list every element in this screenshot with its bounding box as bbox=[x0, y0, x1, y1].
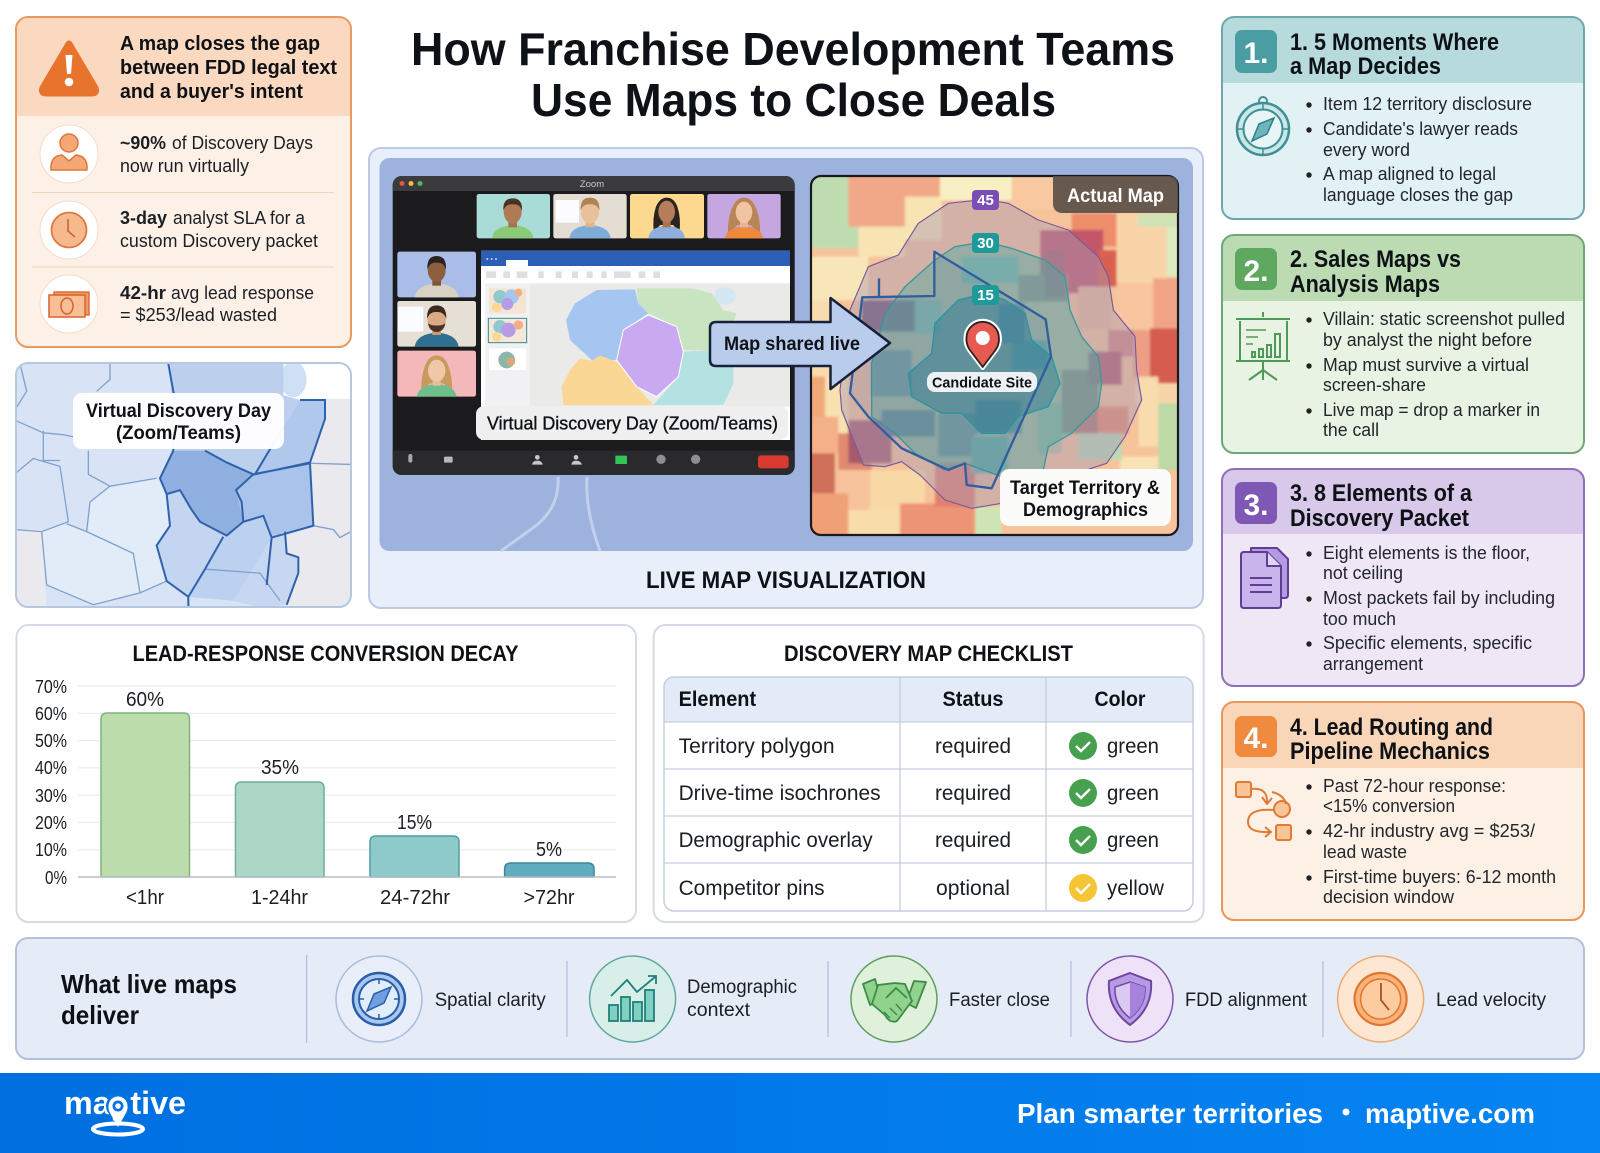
row: territory polygon bbox=[679, 732, 1159, 760]
callout: window caption bbox=[476, 406, 788, 440]
table header: Color bbox=[1094, 688, 1146, 711]
arrow: map shared live: Map shared live bbox=[724, 334, 860, 355]
row: territory polygon: required bbox=[935, 735, 1011, 758]
isochrone 45 minutes bbox=[840, 199, 1142, 508]
icon: routing flow bbox=[1236, 782, 1291, 840]
y axis labels: 30% bbox=[35, 786, 67, 806]
heading bbox=[61, 969, 237, 1030]
row: drive-time isochrones: green bbox=[1107, 782, 1159, 805]
badge: 15 bbox=[972, 285, 999, 305]
badge: 45: 45 bbox=[977, 192, 994, 209]
item: demographic context bbox=[590, 956, 797, 1042]
bullet list: Most packets fail by including bbox=[1323, 587, 1555, 608]
bullet list: 42-hr industry avg = $253/ bbox=[1323, 820, 1536, 841]
stat: lead response bbox=[120, 283, 314, 325]
panel: 5 moments bbox=[1222, 17, 1584, 219]
row: demographic overlay: required bbox=[935, 829, 1011, 852]
table header: Element bbox=[679, 688, 756, 711]
stat: virtual discovery days bbox=[120, 133, 313, 176]
heading bbox=[1290, 246, 1461, 298]
shared screen map app bbox=[481, 251, 790, 440]
bar: over 72hr bbox=[505, 839, 594, 877]
bullet list bbox=[1306, 93, 1532, 205]
bar: 1-24hr bbox=[236, 757, 324, 877]
row: competitor pins: optional bbox=[936, 877, 1010, 900]
tagline bbox=[1017, 1098, 1535, 1129]
y axis labels: 20% bbox=[35, 813, 67, 833]
title: How Franchise Development Teams bbox=[411, 23, 1175, 75]
heading: 3. 8 Elements of a bbox=[1290, 480, 1473, 507]
bullet list: too much bbox=[1323, 608, 1396, 629]
bullet list: Candidate's lawyer reads bbox=[1323, 118, 1518, 139]
heading: Analysis Maps bbox=[1290, 271, 1440, 298]
bullet list: screen-share bbox=[1323, 374, 1426, 395]
panel: discovery map checklist bbox=[654, 625, 1204, 922]
callout: virtual discovery day bbox=[73, 393, 284, 449]
title bbox=[411, 23, 1175, 126]
bullet list: language closes the gap bbox=[1323, 184, 1513, 205]
badge: 1: 1. bbox=[1243, 37, 1269, 70]
isochrone 15 minutes bbox=[908, 293, 1060, 433]
heading: live map visualization: LIVE MAP VISUALIZATION bbox=[646, 567, 926, 594]
stat: virtual discovery days: now run virtually bbox=[120, 156, 249, 176]
bar: under 1hr: 60% bbox=[126, 689, 164, 711]
icon: presentation chart bbox=[1236, 312, 1290, 380]
badge: 4 bbox=[1235, 716, 1277, 757]
item: spatial clarity bbox=[336, 956, 546, 1042]
badge: 2 bbox=[1235, 248, 1277, 290]
table bbox=[664, 677, 1193, 911]
row: drive-time isochrones: Drive-time isochrones bbox=[679, 782, 881, 805]
bullet list: not ceiling bbox=[1323, 562, 1403, 583]
panel: conversion decay chart bbox=[16, 625, 636, 922]
arrow: map shared live bbox=[710, 298, 890, 389]
bar: 1-24hr: 35% bbox=[261, 757, 299, 779]
stat: virtual discovery days: of Discovery Days bbox=[172, 133, 313, 153]
bar chart bbox=[35, 677, 616, 909]
callout: virtual discovery day: Virtual Discovery Day bbox=[86, 401, 271, 422]
label: target territory bbox=[1000, 469, 1171, 526]
heading: 1. 5 Moments Where bbox=[1290, 29, 1499, 56]
row: territory polygon: Territory polygon bbox=[679, 735, 835, 758]
stat: lead response: 42-hr bbox=[120, 283, 166, 303]
zoom call window: Zoom bbox=[580, 179, 604, 190]
panel: lead routing bbox=[1222, 702, 1584, 920]
row: drive-time isochrones bbox=[679, 779, 1159, 807]
item: lead velocity bbox=[1338, 956, 1546, 1042]
badge: 15: 15 bbox=[977, 287, 994, 304]
item: demographic context: Demographic bbox=[687, 977, 797, 998]
bullet list: decision window bbox=[1323, 886, 1455, 907]
bar: 24-72hr: 15% bbox=[397, 812, 432, 834]
row: demographic overlay: Demographic overlay bbox=[679, 829, 873, 852]
label: candidate site: Candidate Site bbox=[932, 374, 1032, 392]
actual map with isochrones bbox=[805, 170, 1185, 540]
x axis labels: 1-24hr bbox=[251, 887, 308, 909]
participant tiles bbox=[397, 194, 781, 397]
bar: over 72hr: 5% bbox=[536, 839, 562, 861]
heading: Discovery Packet bbox=[1290, 505, 1469, 532]
bullet list bbox=[1306, 542, 1555, 674]
table header bbox=[679, 688, 1146, 711]
zoom call window bbox=[392, 170, 1185, 594]
heading: LEAD-RESPONSE CONVERSION DECAY bbox=[132, 641, 519, 666]
row: demographic overlay bbox=[679, 826, 1159, 854]
icon: person bbox=[40, 125, 98, 183]
stat: analyst SLA: 3-day bbox=[120, 208, 167, 228]
row: competitor pins: yellow bbox=[1107, 877, 1165, 900]
footer band bbox=[0, 1073, 1600, 1153]
badge: 30 bbox=[972, 233, 999, 253]
heading bbox=[1290, 480, 1473, 532]
bullet list: by analyst the night before bbox=[1323, 329, 1532, 350]
row: drive-time isochrones: required bbox=[935, 782, 1011, 805]
x axis labels: >72hr bbox=[524, 887, 575, 909]
stat: analyst SLA: analyst SLA for a bbox=[173, 208, 306, 228]
item: faster close bbox=[851, 956, 1050, 1042]
row: competitor pins bbox=[679, 874, 1165, 902]
heading: gap statement: and a buyer's intent bbox=[120, 81, 303, 103]
x axis labels bbox=[126, 887, 575, 909]
callout: window caption: Virtual Discovery Day (Zoom/Teams) bbox=[487, 412, 778, 434]
icon: clock bbox=[40, 201, 98, 259]
item: faster close: Faster close bbox=[949, 990, 1050, 1011]
stat: virtual discovery days: ~90% bbox=[120, 133, 166, 153]
bullet list: lead waste bbox=[1323, 841, 1407, 862]
row: territory polygon: green bbox=[1107, 735, 1159, 758]
logo: maptive: maptive bbox=[64, 1085, 186, 1121]
badge: 30: 30 bbox=[977, 235, 994, 252]
tag: actual map bbox=[1053, 176, 1178, 213]
tagline: maptive.com bbox=[1365, 1098, 1535, 1129]
y axis labels: 50% bbox=[35, 731, 67, 751]
label: target territory: Target Territory & bbox=[1010, 478, 1160, 499]
stat: analyst SLA bbox=[120, 208, 318, 251]
bullet list: Eight elements is the floor, bbox=[1323, 542, 1530, 563]
stat: lead response: avg lead response bbox=[171, 283, 314, 303]
heading: a Map Decides bbox=[1290, 53, 1441, 80]
heading: gap statement: between FDD legal text bbox=[120, 57, 337, 79]
heading bbox=[1290, 29, 1499, 80]
y axis labels: 70% bbox=[35, 677, 67, 697]
bar: under 1hr bbox=[101, 689, 190, 877]
bullet list: Live map = drop a marker in bbox=[1323, 399, 1540, 420]
item: FDD alignment bbox=[1087, 956, 1308, 1042]
stat: analyst SLA: custom Discovery packet bbox=[120, 231, 318, 251]
item: demographic context: context bbox=[687, 1000, 751, 1021]
panel: FDD gap stats bbox=[16, 17, 351, 347]
panel: discovery packet bbox=[1222, 469, 1584, 686]
bullet list: arrangement bbox=[1323, 653, 1423, 674]
heading: deliver bbox=[61, 1000, 139, 1030]
icon: compass bbox=[1237, 97, 1289, 155]
item: spatial clarity: Spatial clarity bbox=[435, 990, 546, 1011]
badge: 1 bbox=[1235, 30, 1277, 73]
y axis labels: 60% bbox=[35, 704, 67, 724]
item: lead velocity: Lead velocity bbox=[1436, 990, 1546, 1011]
bullet list bbox=[1306, 308, 1565, 440]
bullet list bbox=[1306, 775, 1556, 907]
heading: 4. Lead Routing and bbox=[1290, 714, 1493, 741]
row: competitor pins: Competitor pins bbox=[679, 877, 825, 900]
y axis labels: 10% bbox=[35, 840, 67, 860]
panel: sales vs analysis maps bbox=[1222, 235, 1584, 453]
title: Use Maps to Close Deals bbox=[531, 74, 1056, 126]
badge: 45 bbox=[972, 190, 999, 210]
bullet list: every word bbox=[1323, 139, 1410, 160]
bar: 24-72hr bbox=[370, 812, 459, 877]
label: target territory: Demographics bbox=[1023, 500, 1148, 521]
toolbar bbox=[393, 451, 795, 476]
stat: lead response: = $253/lead wasted bbox=[120, 305, 277, 325]
bullet list: Specific elements, specific bbox=[1323, 632, 1532, 653]
x axis labels: <1hr bbox=[126, 887, 164, 909]
bullet list: <15% conversion bbox=[1323, 795, 1455, 816]
bullet list: A map aligned to legal bbox=[1323, 163, 1496, 184]
tag: actual map: Actual Map bbox=[1067, 186, 1164, 207]
item: FDD alignment: FDD alignment bbox=[1185, 990, 1308, 1011]
y axis labels: 40% bbox=[35, 758, 67, 778]
heading: 2. Sales Maps vs bbox=[1290, 246, 1461, 273]
table header: Status bbox=[942, 688, 1004, 711]
tagline: Plan smarter territories bbox=[1017, 1098, 1323, 1129]
bullet list: Item 12 territory disclosure bbox=[1323, 93, 1532, 114]
icon: candidate site pin bbox=[965, 321, 1000, 368]
bullet list: Past 72-hour response: bbox=[1323, 775, 1506, 796]
bullet list: the call bbox=[1323, 419, 1379, 440]
bullet list: First-time buyers: 6-12 month bbox=[1323, 866, 1556, 887]
heading: gap statement bbox=[120, 33, 337, 103]
heading: DISCOVERY MAP CHECKLIST bbox=[784, 641, 1074, 666]
icon: documents bbox=[1241, 548, 1288, 608]
bullet list: Villain: static screenshot pulled bbox=[1323, 308, 1565, 329]
panel: territory map bbox=[16, 362, 352, 608]
heading: gap statement: A map closes the gap bbox=[120, 33, 320, 55]
target territory polygon bbox=[850, 252, 1051, 488]
panel: what live maps deliver bbox=[16, 938, 1584, 1059]
icon: cash bbox=[40, 275, 98, 333]
y axis labels: 0% bbox=[45, 868, 67, 888]
icon: warning triangle bbox=[42, 44, 96, 93]
badge: 2: 2. bbox=[1243, 255, 1269, 288]
callout: virtual discovery day: (Zoom/Teams) bbox=[116, 423, 241, 444]
heading bbox=[1290, 714, 1493, 765]
badge: 3: 3. bbox=[1243, 489, 1269, 522]
x axis labels: 24-72hr bbox=[380, 887, 450, 909]
heading: Pipeline Mechanics bbox=[1290, 738, 1490, 765]
isochrone 30 minutes bbox=[872, 242, 1102, 477]
row: demographic overlay: green bbox=[1107, 829, 1159, 852]
badge: 3 bbox=[1235, 482, 1277, 524]
bullet list: Map must survive a virtual bbox=[1323, 354, 1529, 375]
badge: 4: 4. bbox=[1243, 722, 1269, 755]
heading: What live maps bbox=[61, 969, 237, 999]
y axis labels bbox=[35, 677, 67, 888]
